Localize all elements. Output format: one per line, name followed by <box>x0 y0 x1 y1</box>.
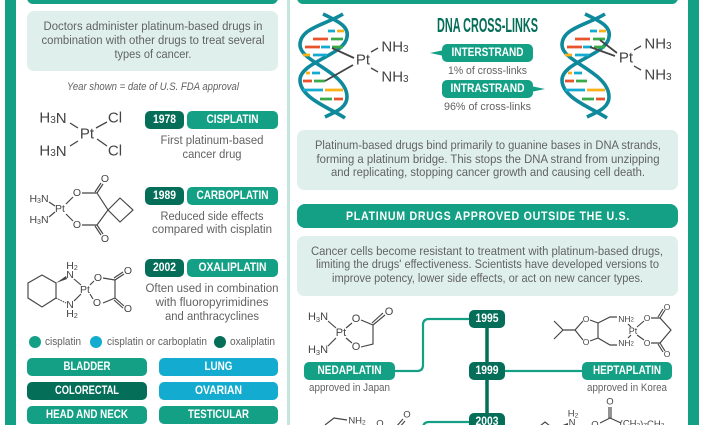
heading: platinum drugs approved outside the U.S. <box>297 204 678 228</box>
legend: cisplatin or carboplatin <box>107 336 207 348</box>
partial molecule: miriplatin: 2 <box>575 412 579 419</box>
mechanism text panel <box>297 130 678 190</box>
heptaplatin label: approved in Korea <box>587 382 667 394</box>
nedaplatin molecule: N <box>320 311 328 323</box>
carboplatin molecule: H <box>29 193 37 205</box>
heptaplatin molecule: O <box>583 314 590 324</box>
cisplatin molecule: Pt <box>80 126 95 142</box>
cisplatin molecule: 3 <box>50 114 56 126</box>
nedaplatin molecule: N <box>320 344 328 356</box>
oxaliplatin molecule: H <box>66 308 74 320</box>
partial molecule: miriplatin <box>540 396 665 425</box>
heptaplatin molecule: O <box>583 337 590 347</box>
cisplatin label <box>145 111 278 161</box>
icon: intrastrand DNA helix with platinum: 3 <box>666 72 672 82</box>
oxaliplatin label: and anthracyclines <box>165 309 259 323</box>
carboplatin molecule: N <box>41 214 49 226</box>
icon: interstrand DNA helix with platinum: NH <box>381 68 403 86</box>
cisplatin molecule: H <box>39 142 50 160</box>
oxaliplatin molecule: 2 <box>74 312 78 320</box>
oxaliplatin label <box>145 259 278 323</box>
nedaplatin molecule: O <box>385 306 394 318</box>
nedaplatin label: approved in Japan <box>309 382 390 394</box>
oxaliplatin label: 2002 <box>153 262 176 274</box>
carboplatin molecule: O <box>101 233 109 245</box>
partial molecule: lobaplatin <box>325 410 411 425</box>
resistance text panel: limiting the drugs' effectiveness. Scientists have developed versions to <box>316 257 659 271</box>
oxaliplatin molecule: 2 <box>74 264 78 272</box>
interstrand label: 1% of cross-links <box>448 65 528 77</box>
left frame bar <box>5 0 16 425</box>
cisplatin molecule: N <box>56 142 67 160</box>
icon: intrastrand DNA helix with platinum: NH <box>644 36 666 52</box>
heptaplatin molecule <box>554 302 671 359</box>
column divider <box>287 0 290 425</box>
nedaplatin label <box>304 362 395 394</box>
partial molecule: lobaplatin: O <box>403 410 411 420</box>
intro text panel <box>27 11 278 71</box>
heptaplatin molecule: NH <box>618 314 630 324</box>
oxaliplatin molecule <box>28 260 132 320</box>
heptaplatin label <box>582 362 672 394</box>
carboplatin molecule: Pt <box>55 203 65 215</box>
icon: intrastrand DNA helix with platinum: 3 <box>666 40 672 52</box>
heptaplatin molecule: O <box>644 313 651 323</box>
legend: cisplatin <box>45 336 81 348</box>
mechanism text panel: forming a platinum bridge. This stops the DNA strand from unzipping <box>316 152 660 166</box>
cancer: colorectal: COLORECTAL <box>55 385 119 397</box>
carboplatin molecule: H <box>29 214 37 226</box>
icon: interstrand DNA helix with platinum: Pt <box>356 52 371 68</box>
intro text panel: combination with other drugs to treat several <box>42 33 264 47</box>
resistance text panel: Cancer cells become resistant to treatment with platinum-based drugs, <box>311 244 663 258</box>
nedaplatin molecule: 3 <box>316 348 320 356</box>
cancer: lung <box>159 358 278 376</box>
carboplatin label: compared with cisplatin <box>152 222 272 236</box>
year 1999: 1999 <box>476 365 498 377</box>
icon: intrastrand DNA helix with platinum: Pt <box>619 50 634 66</box>
cancer types grid <box>27 358 278 424</box>
mechanism text panel: Platinum-based drugs bind primarily to guanine bases in DNA strands, <box>315 138 661 152</box>
resistance text panel: improve potency, lower side effects, or act on new cancer types. <box>332 271 643 285</box>
heptaplatin molecule: Pt <box>629 326 638 336</box>
nedaplatin molecule: H <box>308 311 316 323</box>
approval date note: Year shown = date of U.S. FDA approval <box>67 81 240 93</box>
cancer: colorectal <box>27 382 147 400</box>
nedaplatin molecule <box>308 306 394 356</box>
nedaplatin molecule: 3 <box>316 314 320 324</box>
icon: interstrand DNA helix with platinum: 3 <box>403 74 409 84</box>
cancer: bladder <box>27 358 147 376</box>
nedaplatin molecule: O <box>352 341 361 353</box>
intro text panel: types of cancer. <box>114 47 192 61</box>
cisplatin molecule: Cl <box>108 110 122 126</box>
mechanism text panel: and replicating, stopping cancer growth and causing cell death. <box>331 165 645 179</box>
interstrand label <box>430 44 533 77</box>
icon: interstrand DNA helix with platinum: NH <box>381 38 403 56</box>
carboplatin molecule: O <box>73 219 81 231</box>
icon: interstrand DNA helix with platinum: 3 <box>403 44 409 54</box>
year 2003 <box>469 413 505 425</box>
cancer: testicular: TESTICULAR <box>188 409 250 421</box>
oxaliplatin molecule: Pt <box>80 284 90 296</box>
cancer: bladder: BLADDER <box>64 361 111 373</box>
cisplatin molecule: N <box>56 110 67 126</box>
cisplatin molecule: 3 <box>50 148 56 158</box>
right frame bar <box>688 0 699 425</box>
carboplatin molecule: N <box>41 193 49 205</box>
cisplatin molecule <box>39 110 122 160</box>
panel: right column <box>297 0 678 425</box>
resistance text panel <box>297 236 678 296</box>
heptaplatin molecule: 2 <box>630 342 634 348</box>
cancer: testicular <box>159 406 278 424</box>
interstrand label: INTERSTRAND <box>452 47 524 59</box>
heading: platinum drugs approved outside the U.S.: PLATINUM DRUGS APPROVED OUTSIDE THE U.S. <box>346 209 630 223</box>
cisplatin label: First platinum-based <box>160 133 264 147</box>
cisplatin label: cancer drug <box>182 147 242 161</box>
carboplatin molecule: O <box>101 173 109 185</box>
carboplatin label: Reduced side effects <box>160 209 264 223</box>
cancer: head and neck <box>27 406 147 424</box>
icon: interstrand DNA helix with platinum <box>300 14 409 118</box>
heptaplatin molecule: O <box>644 338 651 348</box>
legend: oxaliplatin <box>230 336 275 348</box>
oxaliplatin label: OXALIPLATIN <box>198 262 266 274</box>
right heading bar <box>297 0 678 4</box>
oxaliplatin molecule: O <box>94 272 102 284</box>
cisplatin molecule: Cl <box>108 142 122 160</box>
intrastrand label: INTRASTRAND <box>450 83 524 95</box>
nedaplatin label: NEDAPLATIN <box>318 365 382 377</box>
cisplatin molecule: H <box>39 110 50 126</box>
panel: left column <box>27 0 278 424</box>
nedaplatin molecule: Pt <box>336 327 346 339</box>
cisplatin label: CISPLATIN <box>206 114 258 126</box>
oxaliplatin molecule: O <box>124 265 132 277</box>
DNA cross-links title: DNA CROSS-LINKS <box>437 15 538 37</box>
oxaliplatin molecule: O <box>124 303 132 315</box>
carboplatin label <box>145 187 278 236</box>
partial molecule: miriplatin: O <box>606 396 614 408</box>
intrastrand label: 96% of cross-links <box>444 101 532 113</box>
oxaliplatin label: with fluoropyrimidines <box>155 295 268 309</box>
icon: intrastrand DNA helix with platinum: NH <box>644 66 666 84</box>
heptaplatin molecule: NH <box>618 338 630 348</box>
carboplatin molecule <box>29 173 133 245</box>
nedaplatin molecule: H <box>308 344 316 356</box>
carboplatin label: CARBOPLATIN <box>196 190 268 202</box>
year 1995: 1995 <box>476 313 499 325</box>
cancer: ovarian <box>159 382 278 400</box>
heptaplatin molecule: 2 <box>630 318 634 324</box>
cancer: head and neck: HEAD AND NECK <box>46 409 129 421</box>
oxaliplatin molecule: N <box>66 269 74 281</box>
icon: intrastrand DNA helix with platinum <box>562 14 672 118</box>
carboplatin molecule: 3 <box>37 198 41 204</box>
heptaplatin molecule: O <box>664 302 671 312</box>
timeline <box>395 310 583 425</box>
cancer: ovarian: OVARIAN <box>195 385 242 397</box>
left heading bar <box>27 0 278 4</box>
carboplatin label: 1989 <box>153 190 176 202</box>
oxaliplatin label: Often used in combination <box>146 281 278 295</box>
nedaplatin molecule: O <box>352 313 361 325</box>
oxaliplatin molecule: O <box>93 297 101 309</box>
intrastrand label <box>442 80 545 113</box>
year 1999 <box>469 362 505 380</box>
cancer: lung: LUNG <box>204 361 233 373</box>
cisplatin label: 1978 <box>153 114 177 126</box>
oxaliplatin molecule: N <box>66 299 74 311</box>
oxaliplatin molecule: H <box>66 260 74 272</box>
carboplatin molecule: O <box>73 187 81 199</box>
legend <box>29 336 275 348</box>
heptaplatin label: HEPTAPLATIN <box>593 365 661 377</box>
carboplatin molecule: 3 <box>37 218 41 226</box>
heptaplatin molecule: O <box>664 349 671 359</box>
intro text panel: Doctors administer platinum-based drugs in <box>44 19 262 33</box>
year 1995 <box>469 310 505 328</box>
partial molecule: miriplatin: H <box>568 408 575 420</box>
